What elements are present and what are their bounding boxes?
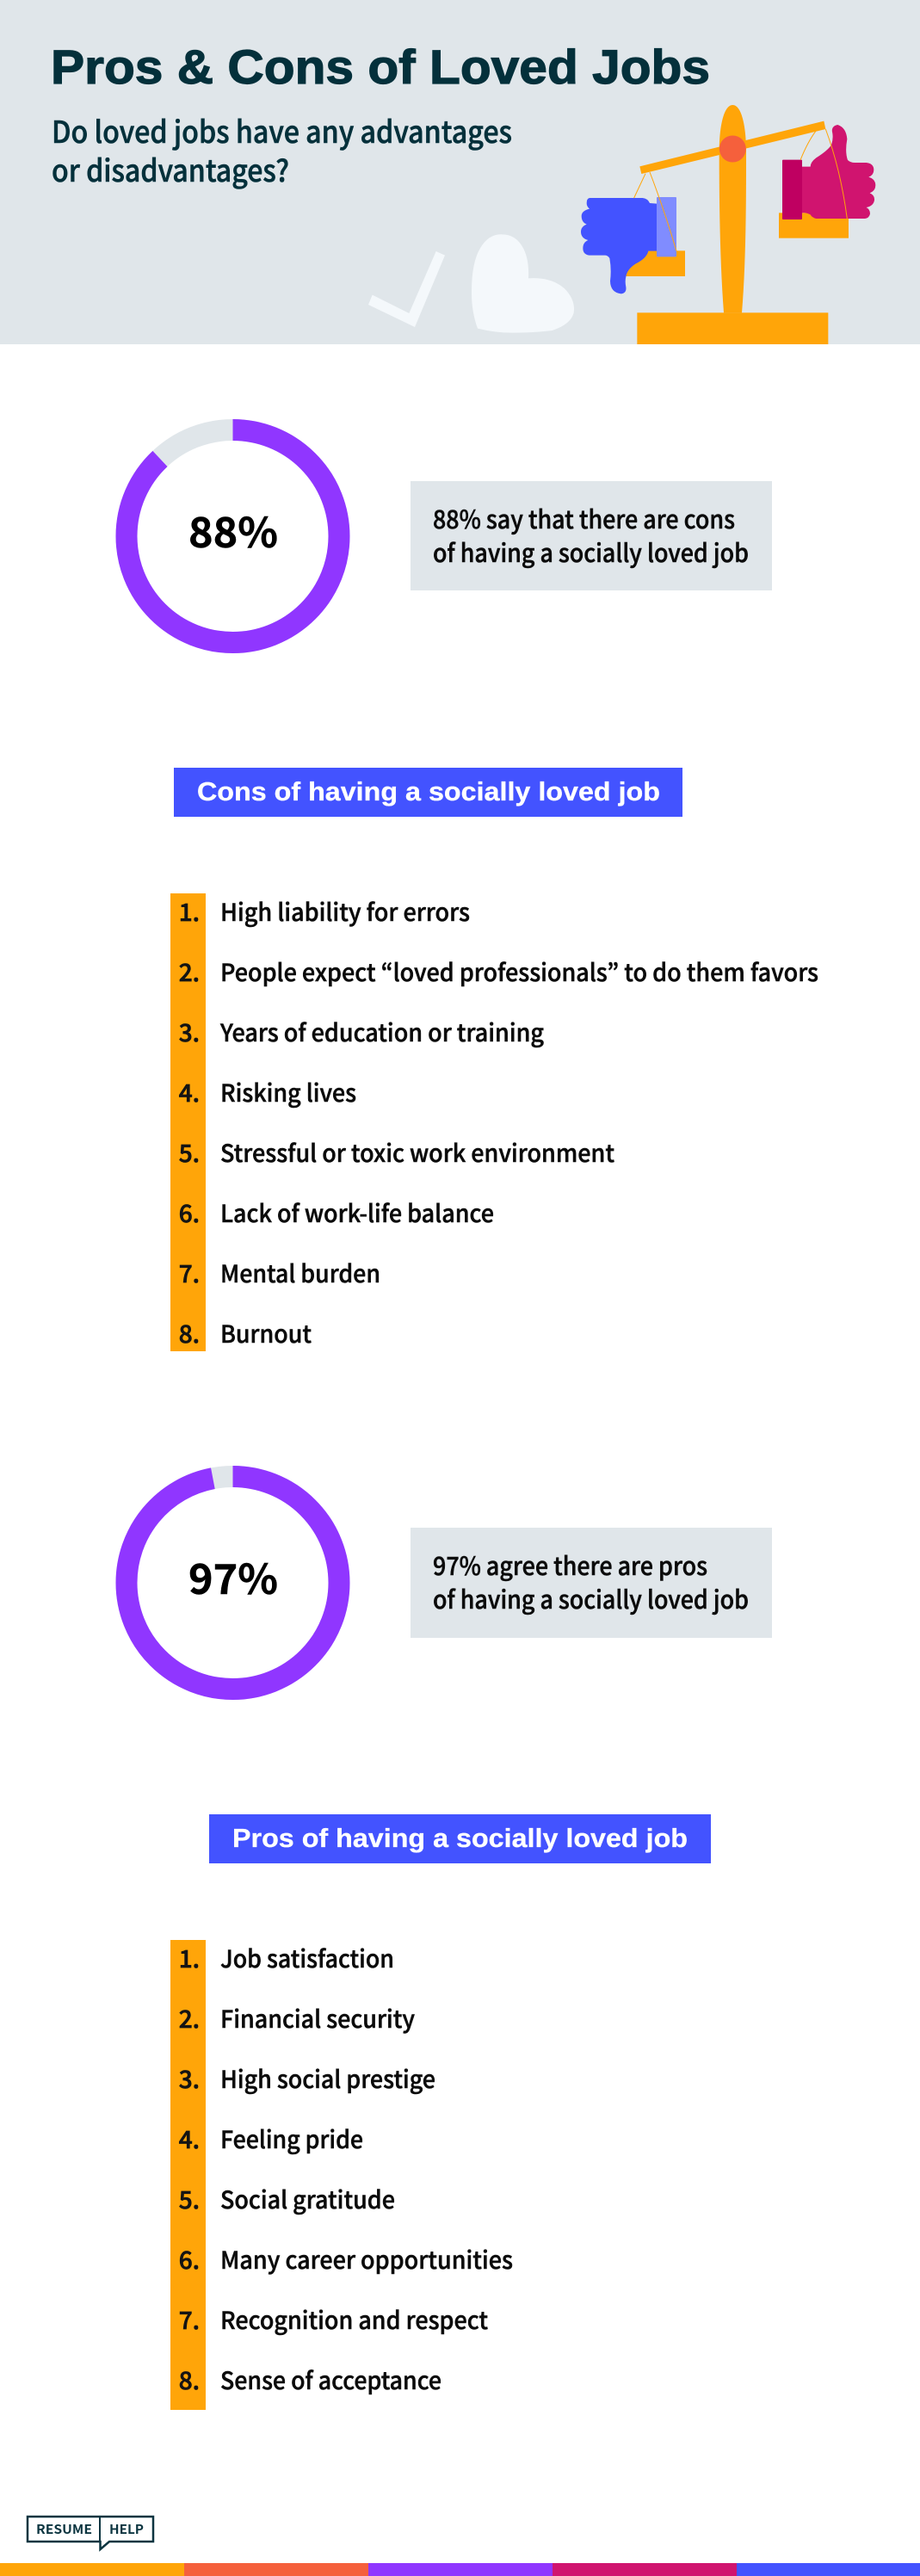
list: cons: Years of education or training: [219, 1015, 544, 1049]
title: Pros & Cons of Loved Jobs: [51, 40, 710, 94]
list: cons: 6.: [179, 1195, 200, 1230]
callout: 97% pros: of having a socially loved job: [433, 1580, 749, 1616]
list: cons: [170, 893, 818, 1351]
icon: check mark: [368, 251, 445, 327]
scale post: [719, 105, 746, 312]
callout: 97% pros: 97% agree there are pros: [433, 1547, 707, 1583]
list: pros: Recognition and respect: [220, 2302, 488, 2337]
list: cons: Mental burden: [220, 1256, 380, 1290]
list: cons: Burnout: [220, 1316, 312, 1350]
list: pros: Job satisfaction: [220, 1941, 394, 1975]
icon: thumbs up: [782, 125, 875, 219]
callout: 97% pros: [411, 1528, 772, 1638]
list: pros: 4.: [179, 2122, 200, 2156]
list: pros: Sense of acceptance: [220, 2363, 441, 2397]
scale base: [637, 312, 828, 344]
logo: Resume Help: [28, 2517, 153, 2549]
list: pros: Feeling pride: [220, 2122, 363, 2156]
right pan: [779, 213, 849, 238]
header panel: [0, 0, 920, 344]
list: cons: 2.: [179, 954, 200, 989]
list: cons: High liability for errors: [220, 894, 470, 929]
list: pros: 5.: [179, 2182, 200, 2216]
list: pros: 2.: [179, 2001, 200, 2035]
list: pros: [170, 1940, 513, 2410]
list: pros: Financial security: [220, 2001, 415, 2035]
donut value: 97%: [188, 1546, 278, 1606]
logo: Resume Help: HELP: [109, 2520, 144, 2538]
subtitle: Do loved jobs have any advantages: [52, 108, 512, 152]
list: pros: Social gratitude: [220, 2182, 395, 2216]
scale beam: [639, 121, 825, 174]
list: pros: 6.: [179, 2242, 200, 2276]
donut chart: 88%: [127, 430, 339, 642]
subtitle: [52, 108, 512, 191]
donut chart: 97%: [127, 1477, 339, 1689]
list: pros: 3.: [179, 2061, 200, 2096]
list: cons: Risking lives: [220, 1075, 356, 1109]
list: pros: 7.: [179, 2302, 200, 2337]
callout: 88% cons: of having a socially loved job: [433, 534, 749, 570]
donut value: 88%: [188, 499, 278, 559]
left pan: [626, 250, 685, 276]
list: cons: People expect “loved professionals” to do them favors: [220, 954, 818, 989]
icon: balance scale with thumbs: [581, 105, 875, 344]
list: cons: Lack of work-life balance: [220, 1195, 494, 1230]
logo: Resume Help: RESUME: [36, 2520, 92, 2538]
subtitle: or disadvantages?: [52, 147, 289, 191]
list: cons: Stressful or toxic work environment: [220, 1135, 614, 1170]
list: cons: 5.: [179, 1135, 200, 1170]
list: pros: 1.: [179, 1941, 200, 1975]
heading: cons: [174, 768, 682, 817]
icon: heart: [472, 234, 574, 333]
list: pros: High social prestige: [220, 2061, 435, 2096]
callout: 88% cons: [411, 481, 772, 590]
icon: thumbs down: [581, 197, 676, 293]
list: cons: 8.: [179, 1316, 200, 1350]
list: cons: 3.: [179, 1015, 200, 1049]
list: cons: 1.: [179, 894, 200, 929]
footer color stripe: [0, 2563, 920, 2576]
list: pros: Many career opportunities: [220, 2242, 513, 2276]
heading: cons: Cons of having a socially loved job: [197, 776, 660, 806]
list: cons: 4.: [179, 1075, 200, 1109]
callout: 88% cons: 88% say that there are cons: [433, 500, 735, 536]
scale strings: [634, 129, 847, 251]
list: pros: 8.: [179, 2363, 200, 2397]
list: cons: 7.: [179, 1256, 200, 1290]
heading: pros: [209, 1814, 711, 1863]
heading: pros: Pros of having a socially loved job: [232, 1823, 688, 1853]
scale pivot: [719, 135, 746, 162]
